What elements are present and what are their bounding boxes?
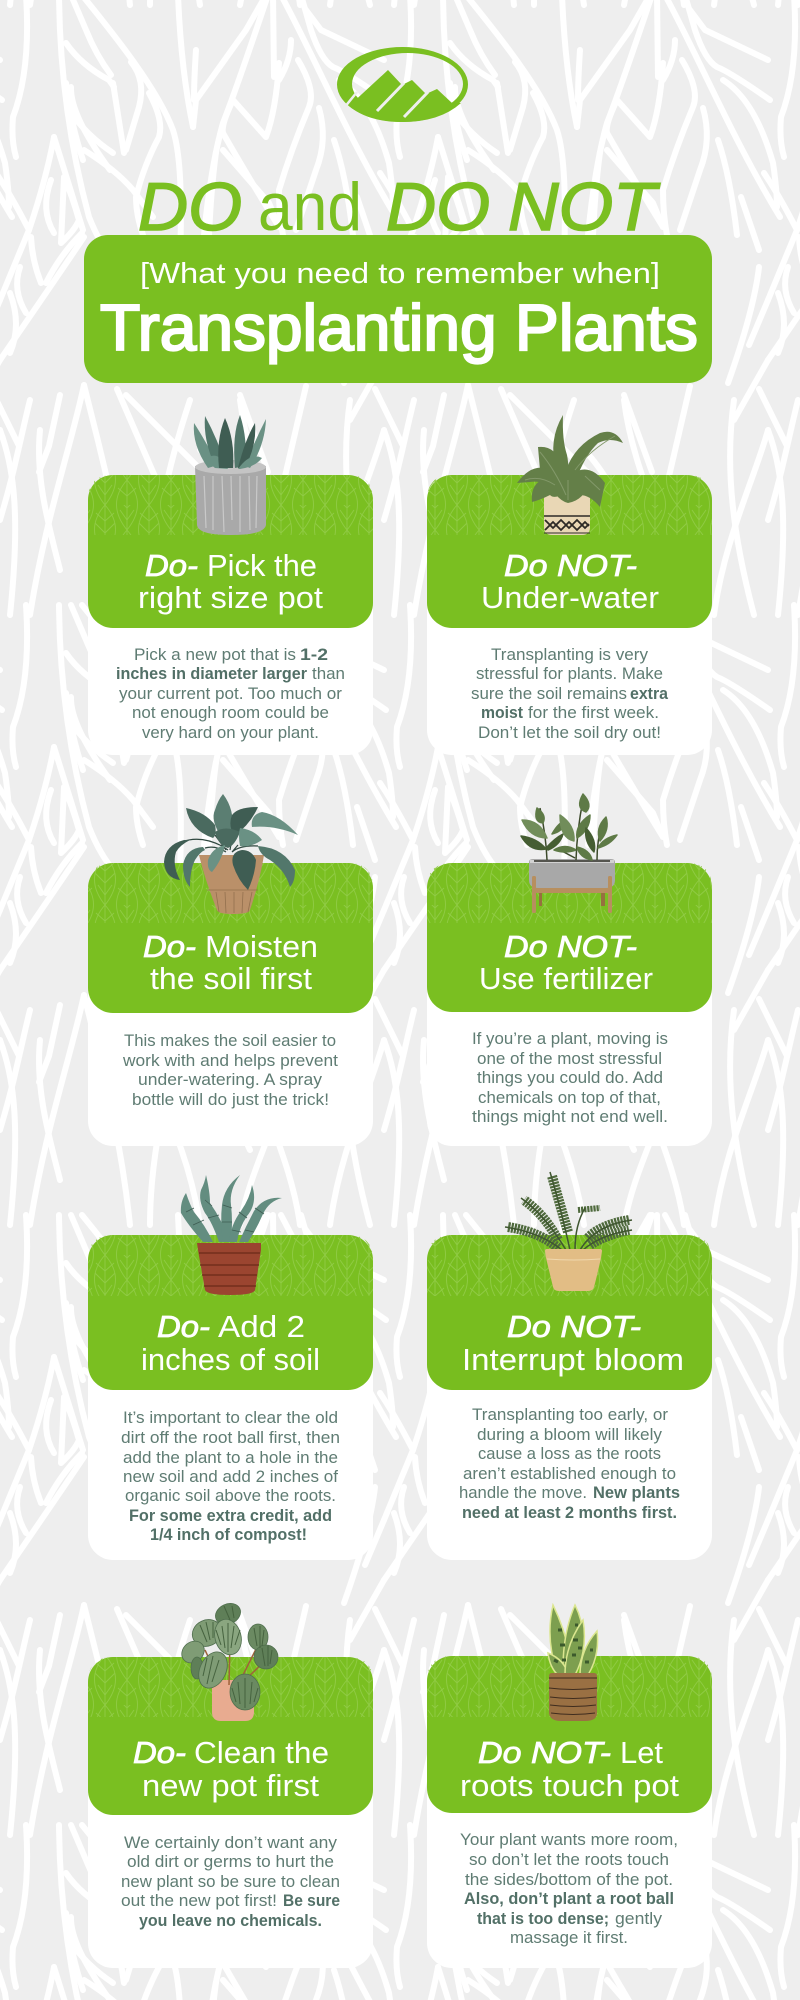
- body text: things you could do. Add: [477, 1069, 663, 1087]
- icon: wavy snake plant in red clay pot: [181, 1175, 282, 1295]
- body text: Your plant wants more room,: [460, 1831, 678, 1849]
- body text: For some extra credit, add: [129, 1507, 332, 1525]
- heading: roots touch pot: [460, 1768, 679, 1803]
- body text: Don’t let the soil dry out!: [478, 724, 661, 742]
- title: do and do not: NOT: [508, 169, 661, 245]
- title: do and do not: and: [258, 169, 362, 245]
- heading: Clean the: [194, 1735, 329, 1770]
- body text: extra: [630, 685, 669, 703]
- body text: Pick a new pot that is: [134, 646, 296, 664]
- body text: [471, 646, 669, 742]
- heading: Use fertilizer: [479, 961, 653, 996]
- body text: organic soil above the roots.: [125, 1487, 336, 1505]
- subtitle: [What you need to remember when]: [140, 258, 660, 290]
- icon: snake plant in striped brown pot: [548, 1605, 598, 1721]
- body text: [121, 1409, 340, 1544]
- body text: aren’t established enough to: [463, 1465, 676, 1483]
- body text: things might not end well.: [472, 1108, 668, 1126]
- body text: [460, 1831, 678, 1947]
- body text: work with and helps prevent: [122, 1052, 338, 1070]
- body text: Transplanting too early, or: [472, 1406, 669, 1424]
- body text: [116, 646, 345, 742]
- body text: bottle will do just the trick!: [132, 1091, 329, 1109]
- body text: [459, 1406, 680, 1522]
- heading: [138, 548, 323, 615]
- heading: Moisten: [205, 929, 318, 964]
- body text: [472, 1030, 668, 1126]
- main heading: Transplanting Plants: [100, 291, 698, 364]
- panel: do moisten the soil first: [88, 794, 373, 1146]
- icon: round striped leaves in peach pot: [177, 1599, 278, 1721]
- title: do and do not: DO: [386, 169, 490, 245]
- body text: need at least 2 months first.: [462, 1504, 677, 1522]
- body text: chemicals on top of that,: [478, 1089, 661, 1107]
- heading: new pot first: [142, 1768, 319, 1803]
- heading: Add 2: [218, 1309, 305, 1344]
- title: do and do not: DO: [138, 169, 242, 245]
- icon: leafy plant in terracotta basket: [164, 794, 298, 914]
- body text: new soil and add 2 inches of: [123, 1468, 338, 1486]
- body text: New plants: [593, 1484, 680, 1502]
- heading: Under-water: [481, 580, 659, 615]
- body text: cause a loss as the roots: [478, 1445, 661, 1463]
- icon: fern in tan pot: [505, 1172, 632, 1291]
- heading: Interrupt bloom: [462, 1342, 684, 1377]
- body text: add the plant to a hole in the: [123, 1449, 338, 1467]
- body text: We certainly don’t want any: [124, 1834, 338, 1852]
- body text: not enough room could be: [132, 704, 329, 722]
- panel: do not interrupt bloom: [427, 1172, 712, 1560]
- body text: for the first week.: [528, 704, 659, 722]
- heading: [481, 548, 659, 615]
- body text: Also, don’t plant a root ball: [464, 1890, 674, 1908]
- body text: you leave no chemicals.: [139, 1912, 322, 1930]
- heading: Do NOT-: [478, 1735, 611, 1770]
- heading: Let: [620, 1735, 663, 1770]
- body text: during a bloom will likely: [477, 1426, 663, 1444]
- body text: handle the move.: [459, 1484, 587, 1502]
- heading: [479, 929, 653, 996]
- body text: 1-2: [300, 646, 328, 664]
- body text: 1/4 inch of compost!: [150, 1526, 307, 1544]
- body text: one of the most stressful: [477, 1050, 662, 1068]
- body text: This makes the soil easier to: [124, 1032, 336, 1050]
- heading: Do-: [145, 548, 198, 583]
- body text: stressful for plants. Make: [476, 665, 663, 683]
- heading: Do-: [143, 929, 196, 964]
- body text: than: [312, 665, 345, 683]
- body text: so don’t let the roots touch: [469, 1851, 669, 1869]
- body text: your current pot. Too much or: [119, 685, 343, 703]
- heading: [143, 929, 318, 996]
- body text: moist: [481, 704, 523, 722]
- body text: Be sure: [283, 1892, 340, 1910]
- heading: [141, 1309, 320, 1377]
- body text: that is too dense;: [477, 1910, 609, 1928]
- body text: sure the soil remains: [471, 685, 627, 703]
- panel: do add 2 inches of soil: [88, 1175, 373, 1560]
- heading: Do-: [157, 1309, 210, 1344]
- body text: the sides/bottom of the pot.: [465, 1871, 673, 1889]
- panel: do clean the new pot first: [88, 1599, 373, 1968]
- icon: fern in patterned cream pot: [517, 415, 623, 535]
- heading: Do NOT-: [507, 1309, 641, 1344]
- icon: mountain logo: [337, 47, 468, 122]
- panel: do pick the right size pot: [88, 415, 373, 755]
- body text: very hard on your plant.: [142, 724, 319, 742]
- panel: do not let roots touch pot: [427, 1605, 712, 1968]
- body text: new plant so be sure to clean: [121, 1873, 340, 1891]
- body text: under-watering. A spray: [138, 1071, 323, 1089]
- icon: aloe in grey pot: [194, 415, 266, 535]
- heading: Do NOT-: [504, 548, 637, 583]
- heading: Do-: [133, 1735, 186, 1770]
- heading: [460, 1735, 679, 1803]
- heading: the soil first: [150, 961, 312, 996]
- panel: header banner: [84, 235, 712, 383]
- panel: do not under-water: [427, 415, 712, 755]
- body text: massage it first.: [510, 1929, 628, 1947]
- panel: do not use fertilizer: [427, 794, 712, 1146]
- body text: gently: [615, 1910, 663, 1928]
- heading: right size pot: [138, 580, 323, 615]
- heading: [462, 1309, 684, 1377]
- heading: Do NOT-: [504, 929, 637, 964]
- icon: seedlings in grey planter on wooden stand: [521, 794, 617, 913]
- heading: [133, 1735, 329, 1803]
- title: do and do not: [138, 169, 661, 245]
- heading: inches of soil: [141, 1342, 320, 1377]
- body text: [121, 1834, 340, 1930]
- body text: old dirt or germs to hurt the: [127, 1853, 334, 1871]
- body text: Transplanting is very: [491, 646, 649, 664]
- body text: [122, 1032, 338, 1109]
- body text: It’s important to clear the old: [123, 1409, 338, 1427]
- heading: Pick the: [207, 548, 317, 583]
- body text: If you’re a plant, moving is: [472, 1030, 668, 1048]
- body text: inches in diameter larger: [116, 665, 308, 683]
- body text: dirt off the root ball first, then: [121, 1429, 340, 1447]
- body text: out the new pot first!: [121, 1892, 277, 1910]
